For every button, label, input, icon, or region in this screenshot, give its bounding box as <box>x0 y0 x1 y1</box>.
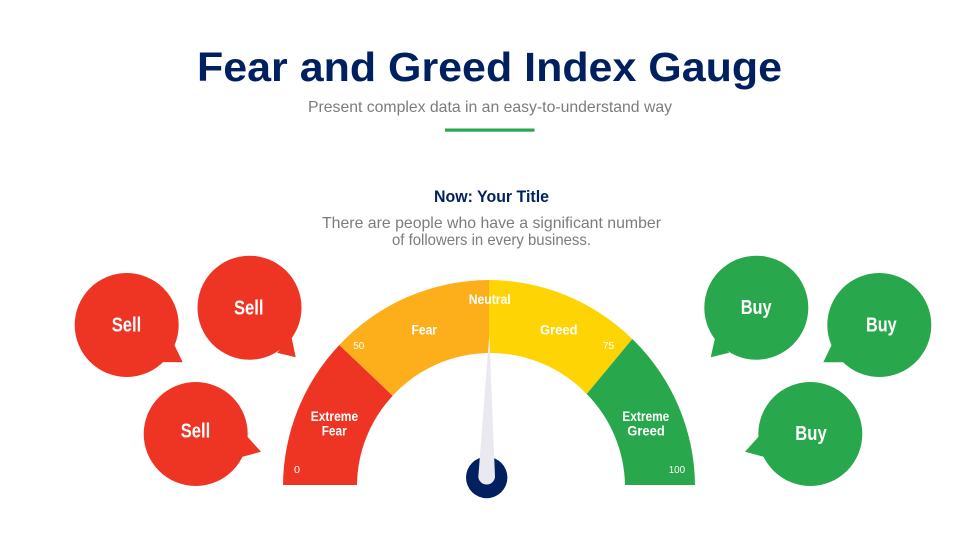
scale value 0: 0 <box>294 464 300 476</box>
speech bubble: buy top <box>704 256 808 360</box>
scale value 50: 50 <box>353 340 364 352</box>
segment: fear <box>339 280 489 396</box>
segment: greed <box>489 280 632 394</box>
subtitle: Present complex data in an easy-to-understand way <box>308 99 672 116</box>
speech bubble: buy right: Buy <box>866 315 897 337</box>
speech bubble: sell top <box>198 256 302 360</box>
speech bubble: sell top: Sell <box>234 297 264 319</box>
label: greed: Greed <box>540 322 578 337</box>
section heading: Now: Your Title <box>434 188 549 206</box>
gauge <box>283 280 695 498</box>
speech bubble: buy bottom: Buy <box>795 423 827 445</box>
speech bubble: sell bottom <box>144 382 261 486</box>
title: Fear and Greed Index Gauge <box>197 44 782 90</box>
speech bubble: sell left <box>75 273 183 377</box>
speech bubble: buy right <box>823 273 931 377</box>
description text: There are people who have a significant number <box>322 215 662 232</box>
label: extreme greed <box>622 409 670 438</box>
label: neutral: Neutral <box>469 292 511 307</box>
needle hub <box>466 457 507 498</box>
description text: of followers in every business. <box>392 232 591 249</box>
segment: extreme greed <box>587 339 695 485</box>
label: extreme fear: Fear <box>322 423 347 438</box>
label: fear: Fear <box>412 322 438 337</box>
speech bubble: sell left: Sell <box>112 314 141 336</box>
speech bubble: buy bottom <box>745 382 862 486</box>
title underline <box>445 128 534 132</box>
scale value 100: 100 <box>669 464 685 476</box>
label: extreme greed: Extreme <box>622 409 670 424</box>
speech bubble: sell bottom: Sell <box>181 421 210 443</box>
label: extreme greed: Greed <box>627 423 665 438</box>
speech bubble: buy top: Buy <box>741 297 772 319</box>
label: extreme fear <box>311 409 359 438</box>
needle <box>478 335 495 484</box>
description text <box>322 215 662 249</box>
scale value 75: 75 <box>603 340 614 352</box>
label: extreme fear: Extreme <box>311 409 359 424</box>
segment: extreme fear <box>283 345 393 485</box>
